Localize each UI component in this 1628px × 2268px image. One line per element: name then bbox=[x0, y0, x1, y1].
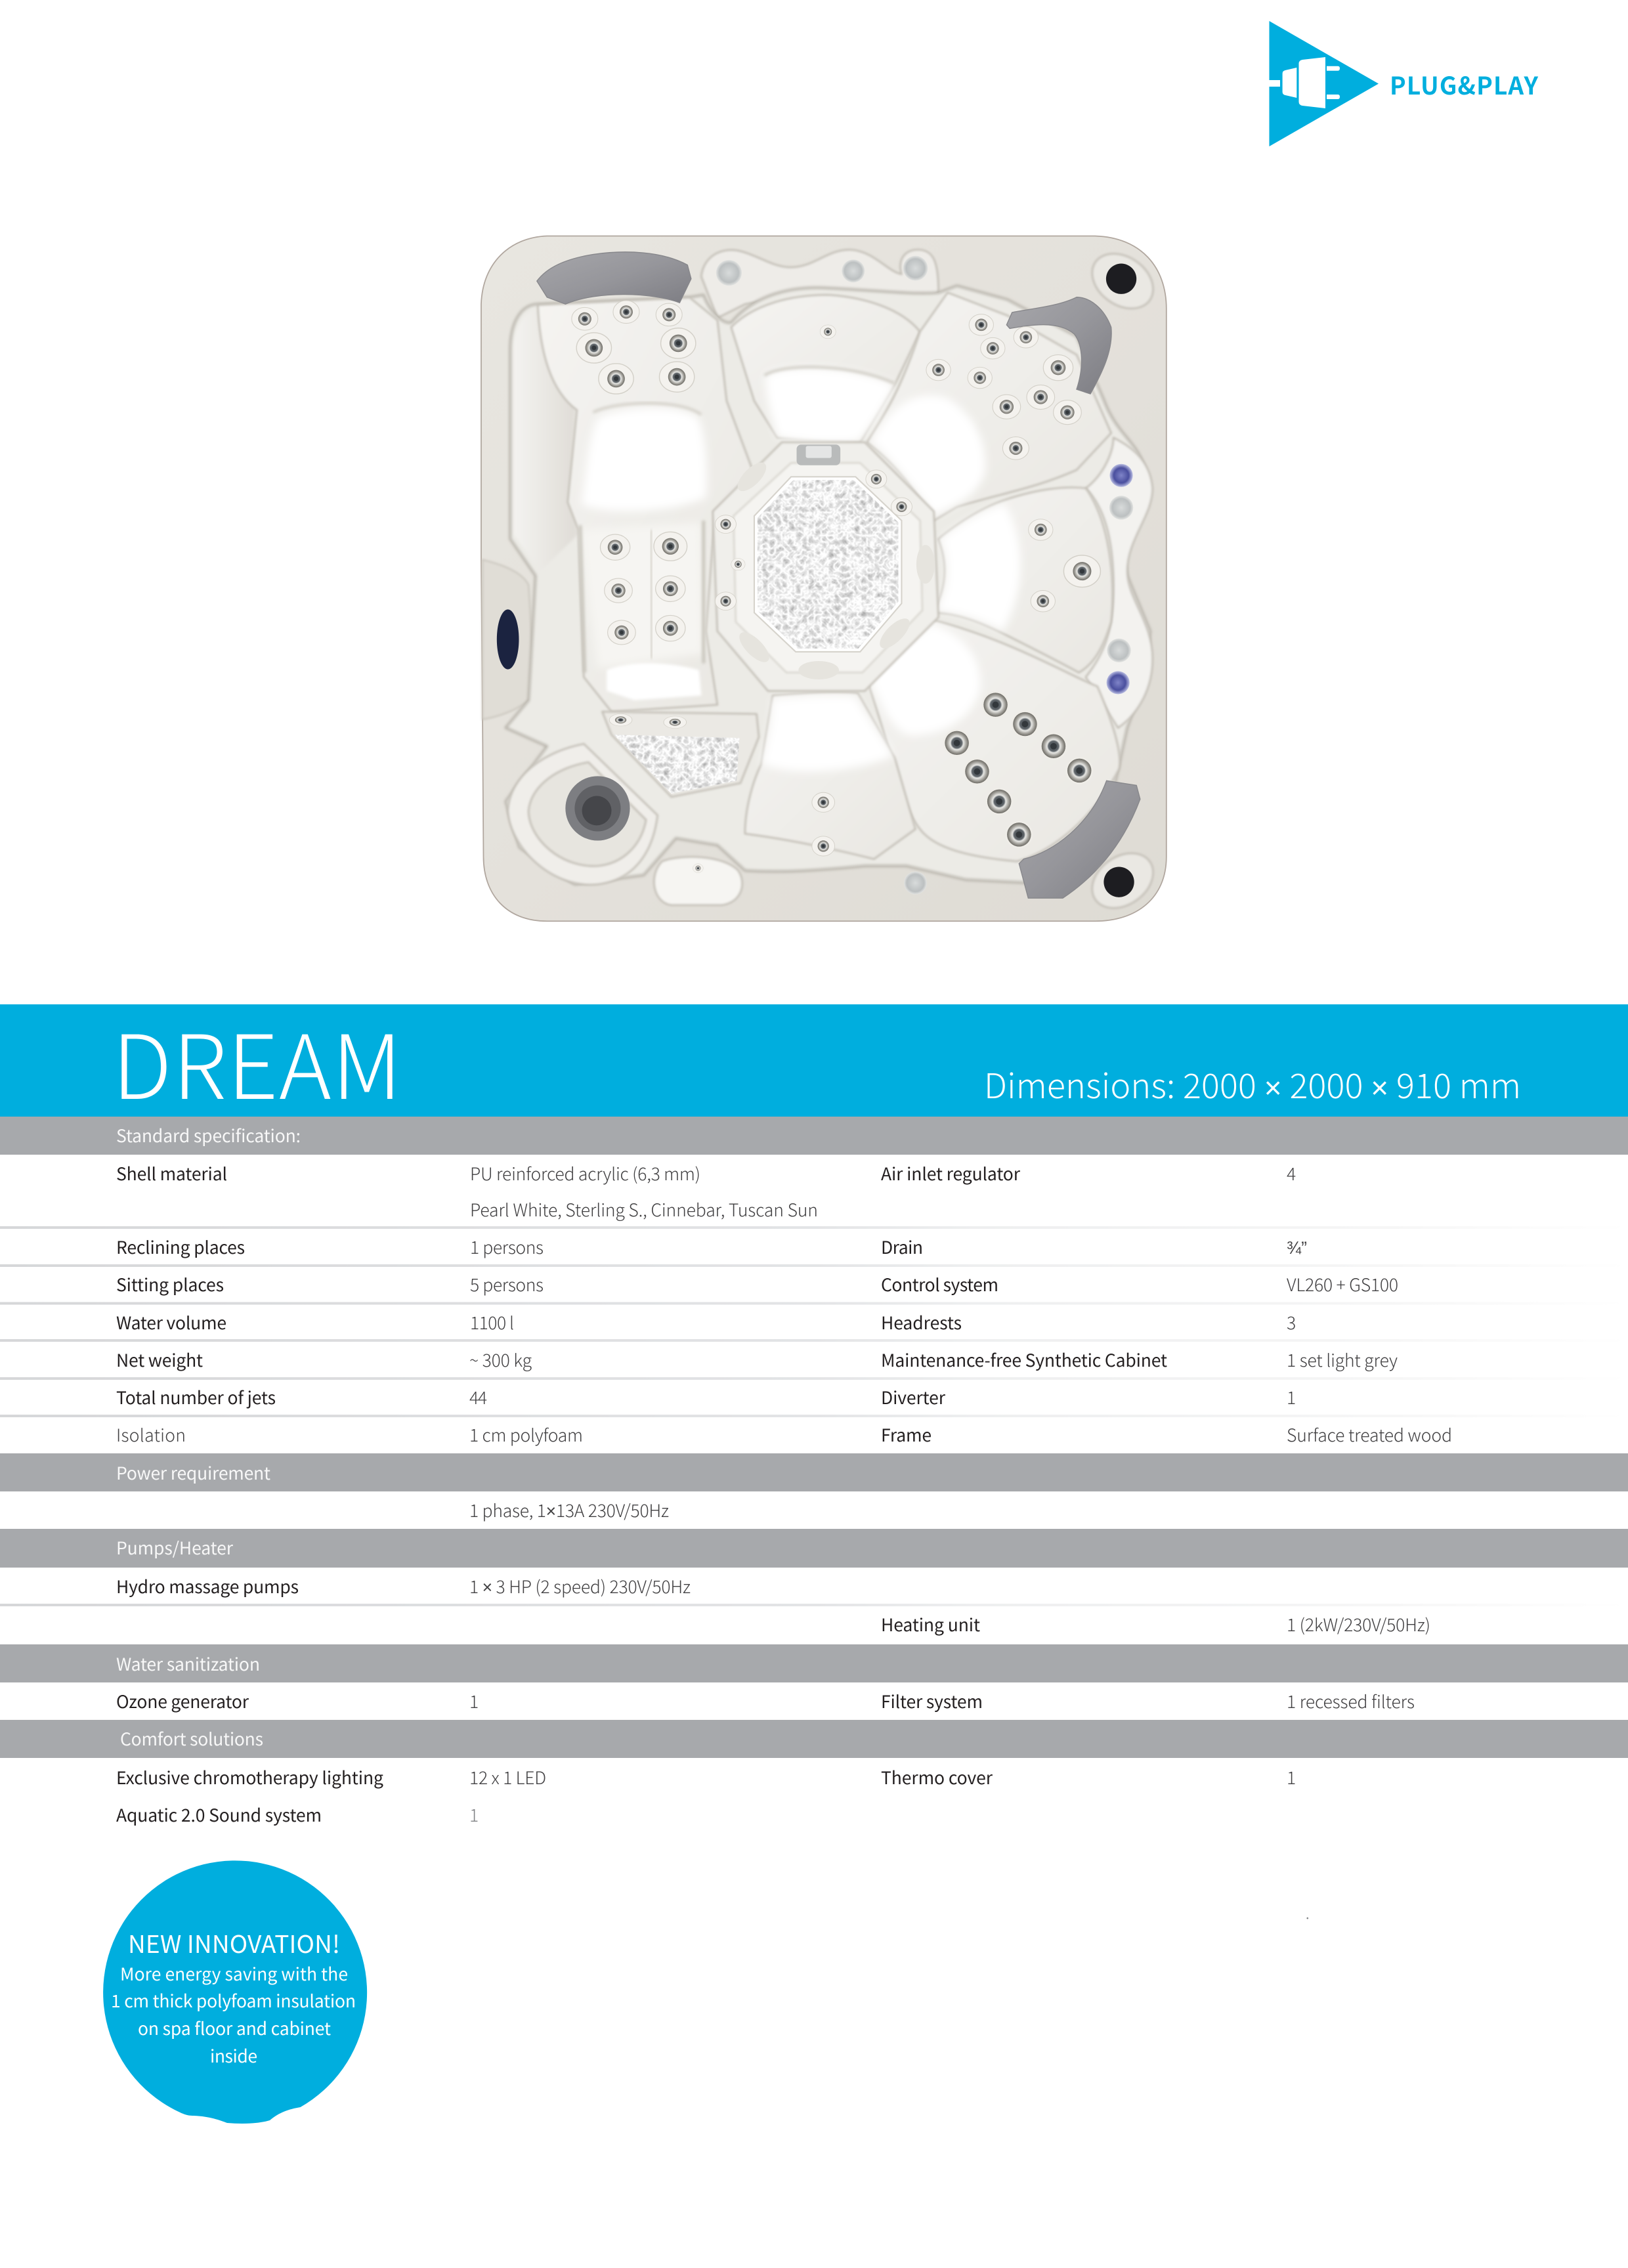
row: net weight: ~ 300 kg bbox=[469, 1346, 532, 1372]
row: net weight: Net weight bbox=[116, 1346, 203, 1372]
row: reclining places bbox=[116, 1233, 544, 1259]
control panel recess bbox=[482, 560, 536, 719]
callout text: More energy saving with the bbox=[120, 1960, 348, 1986]
title band bbox=[0, 996, 1628, 1124]
top seat bbox=[731, 295, 920, 443]
row: shell material: Pearl White, Sterling S., Cinnebar, Tuscan Sun bbox=[470, 1196, 818, 1222]
row: air inlet regulator: 4 bbox=[1287, 1160, 1296, 1186]
row: sitting places bbox=[116, 1271, 544, 1296]
bottom seat bbox=[745, 693, 915, 859]
row: headrests: 3 bbox=[1287, 1309, 1296, 1335]
row: water volume: 1100 l bbox=[470, 1309, 514, 1335]
row: chromotherapy lighting bbox=[116, 1764, 546, 1789]
footwell ring bbox=[713, 442, 939, 691]
corner surround: bottom right bbox=[1082, 842, 1163, 919]
row: water volume: Water volume bbox=[116, 1309, 226, 1335]
callout text: on spa floor and cabinet bbox=[138, 2015, 331, 2040]
headrest: top left bbox=[537, 252, 691, 304]
dimensions: Dimensions: 2000 × 2000 × 910 mm bbox=[984, 1059, 1521, 1108]
section bar: standard specification bbox=[0, 1117, 1628, 1155]
row: total number of jets: 44 bbox=[469, 1384, 487, 1409]
row: isolation: Isolation bbox=[116, 1421, 186, 1447]
row: ozone generator bbox=[116, 1688, 479, 1713]
callout text: inside bbox=[210, 2042, 257, 2068]
row: maintenance-free synthetic cabinet: Maintenance-free Synthetic Cabinet bbox=[881, 1346, 1167, 1372]
row: frame: Frame bbox=[881, 1421, 932, 1447]
row: net weight bbox=[116, 1346, 532, 1372]
row: power value: 1 phase, 1×13A 230V/50Hz bbox=[469, 1497, 669, 1522]
row: drain: Drain bbox=[881, 1233, 923, 1259]
row: control system bbox=[881, 1271, 1398, 1296]
air valves: blue bbox=[1107, 464, 1133, 694]
stray full stop: . bbox=[1306, 1904, 1310, 1923]
logo wordmark: PLUG&PLAY bbox=[1390, 66, 1539, 102]
row: filter system: Filter system bbox=[881, 1688, 983, 1713]
step platform bbox=[602, 712, 759, 797]
massage jets bbox=[572, 301, 1100, 873]
row: total number of jets: Total number of jets bbox=[116, 1384, 276, 1409]
row: heating unit: Heating unit bbox=[881, 1611, 980, 1637]
row: ozone generator: Ozone generator bbox=[116, 1688, 249, 1713]
footwell water texture bbox=[754, 477, 901, 652]
callout text bbox=[111, 1960, 356, 2068]
row: shell material: PU reinforced acrylic (6,3 mm) bbox=[470, 1160, 700, 1186]
logo: plug and play bbox=[1270, 21, 1539, 146]
row: maintenance-free synthetic cabinet: 1 set light grey bbox=[1287, 1346, 1398, 1372]
title: DREAM: DREAM bbox=[112, 996, 402, 1124]
row: hydro massage pumps: Hydro massage pumps bbox=[116, 1573, 299, 1598]
callout blob bbox=[103, 1860, 367, 2124]
row: heating unit bbox=[881, 1611, 1430, 1637]
row: filter system: 1 recessed filters bbox=[1287, 1688, 1415, 1713]
section bar: power requirement: Power requirement bbox=[116, 1459, 270, 1485]
row: hydro massage pumps: 1 × 3 HP (2 speed) 230V/50Hz bbox=[469, 1573, 691, 1598]
section bar: comfort solutions: Comfort solutions bbox=[120, 1725, 263, 1751]
waterfall fixture bbox=[796, 444, 840, 465]
right wavy channel bbox=[1086, 438, 1153, 728]
right seat bbox=[934, 488, 1113, 672]
row: diverter: Diverter bbox=[881, 1384, 946, 1409]
row: sitting places: Sitting places bbox=[116, 1271, 224, 1296]
left seat bbox=[538, 297, 754, 712]
row: ozone generator: 1 bbox=[469, 1688, 479, 1713]
headrest: bottom right bbox=[1019, 781, 1140, 898]
row: total number of jets bbox=[116, 1384, 487, 1409]
row: sitting places: 5 persons bbox=[470, 1271, 544, 1296]
air valves: grey bbox=[716, 256, 1133, 895]
row: sound system: Aquatic 2.0 Sound system bbox=[116, 1801, 322, 1827]
section bar: comfort solutions bbox=[0, 1720, 1628, 1758]
row: shell material bbox=[116, 1160, 818, 1222]
hot tub top view bbox=[481, 236, 1167, 921]
row: hydro massage pumps bbox=[116, 1573, 691, 1598]
row: air inlet regulator: Air inlet regulator bbox=[881, 1160, 1021, 1186]
row: sound system bbox=[116, 1801, 479, 1827]
row: thermo cover bbox=[881, 1764, 1296, 1789]
section bar: pumps and heater: Pumps/Heater bbox=[116, 1534, 234, 1560]
corner surround: top right bbox=[1082, 242, 1163, 320]
control panel display bbox=[497, 609, 519, 670]
section bar: pumps and heater bbox=[0, 1529, 1628, 1568]
top right seat bbox=[867, 293, 1111, 521]
small bottom basin bbox=[654, 857, 742, 905]
inner well shadow edge bbox=[505, 286, 1150, 884]
row: diverter bbox=[881, 1384, 1296, 1409]
row: shell material: Shell material bbox=[116, 1160, 227, 1186]
row: chromotherapy lighting: 12 x 1 LED bbox=[469, 1764, 546, 1789]
callout heading: NEW INNOVATION! bbox=[128, 1925, 340, 1960]
row: drain bbox=[881, 1233, 1307, 1259]
section bar: standard specification: Standard specification: bbox=[116, 1122, 301, 1147]
section bar: water sanitization bbox=[0, 1644, 1628, 1682]
top deck ridge bbox=[701, 249, 939, 318]
section bar: water sanitization: Water sanitization bbox=[116, 1650, 260, 1676]
row: reclining places: Reclining places bbox=[116, 1233, 245, 1259]
row: reclining places: 1 persons bbox=[470, 1233, 544, 1259]
pillow anchor: top right bbox=[1106, 264, 1136, 294]
inner well bbox=[505, 286, 1150, 884]
callout text: 1 cm thick polyfoam insulation bbox=[111, 1987, 356, 2013]
row: isolation: 1 cm polyfoam bbox=[469, 1421, 583, 1447]
row: control system: Control system bbox=[881, 1271, 998, 1296]
row: isolation bbox=[116, 1421, 583, 1447]
row: diverter: 1 bbox=[1287, 1384, 1296, 1409]
row: control system: VL260 + GS100 bbox=[1287, 1271, 1398, 1296]
bottom right seat bbox=[867, 620, 1120, 861]
row: headrests: Headrests bbox=[881, 1309, 962, 1335]
row: chromotherapy lighting: Exclusive chromotherapy lighting bbox=[116, 1764, 383, 1789]
row: heating unit: 1 (2kW/230V/50Hz) bbox=[1287, 1611, 1430, 1637]
left wall shading bbox=[514, 308, 580, 571]
filter intake bbox=[565, 776, 630, 841]
tub outer shell bbox=[481, 236, 1167, 921]
pillow anchor: bottom right bbox=[1103, 867, 1134, 897]
filter bay bbox=[508, 744, 658, 885]
row: thermo cover: 1 bbox=[1287, 1764, 1296, 1789]
row: water volume bbox=[116, 1309, 514, 1335]
row: thermo cover: Thermo cover bbox=[881, 1764, 993, 1789]
headrest: top right bbox=[1006, 297, 1111, 394]
row: air inlet regulator bbox=[881, 1160, 1296, 1186]
callout: new innovation bbox=[103, 1860, 367, 2124]
row: headrests bbox=[881, 1309, 1296, 1335]
row: drain: ¾” bbox=[1287, 1238, 1307, 1258]
row: filter system bbox=[881, 1688, 1415, 1713]
icon: triangle with plug bbox=[1270, 21, 1379, 146]
row: sound system: 1 bbox=[469, 1801, 479, 1827]
row: maintenance-free synthetic cabinet bbox=[881, 1346, 1398, 1372]
row: frame: Surface treated wood bbox=[1287, 1421, 1452, 1447]
section bar: power requirement bbox=[0, 1453, 1628, 1491]
row: frame bbox=[881, 1421, 1452, 1447]
